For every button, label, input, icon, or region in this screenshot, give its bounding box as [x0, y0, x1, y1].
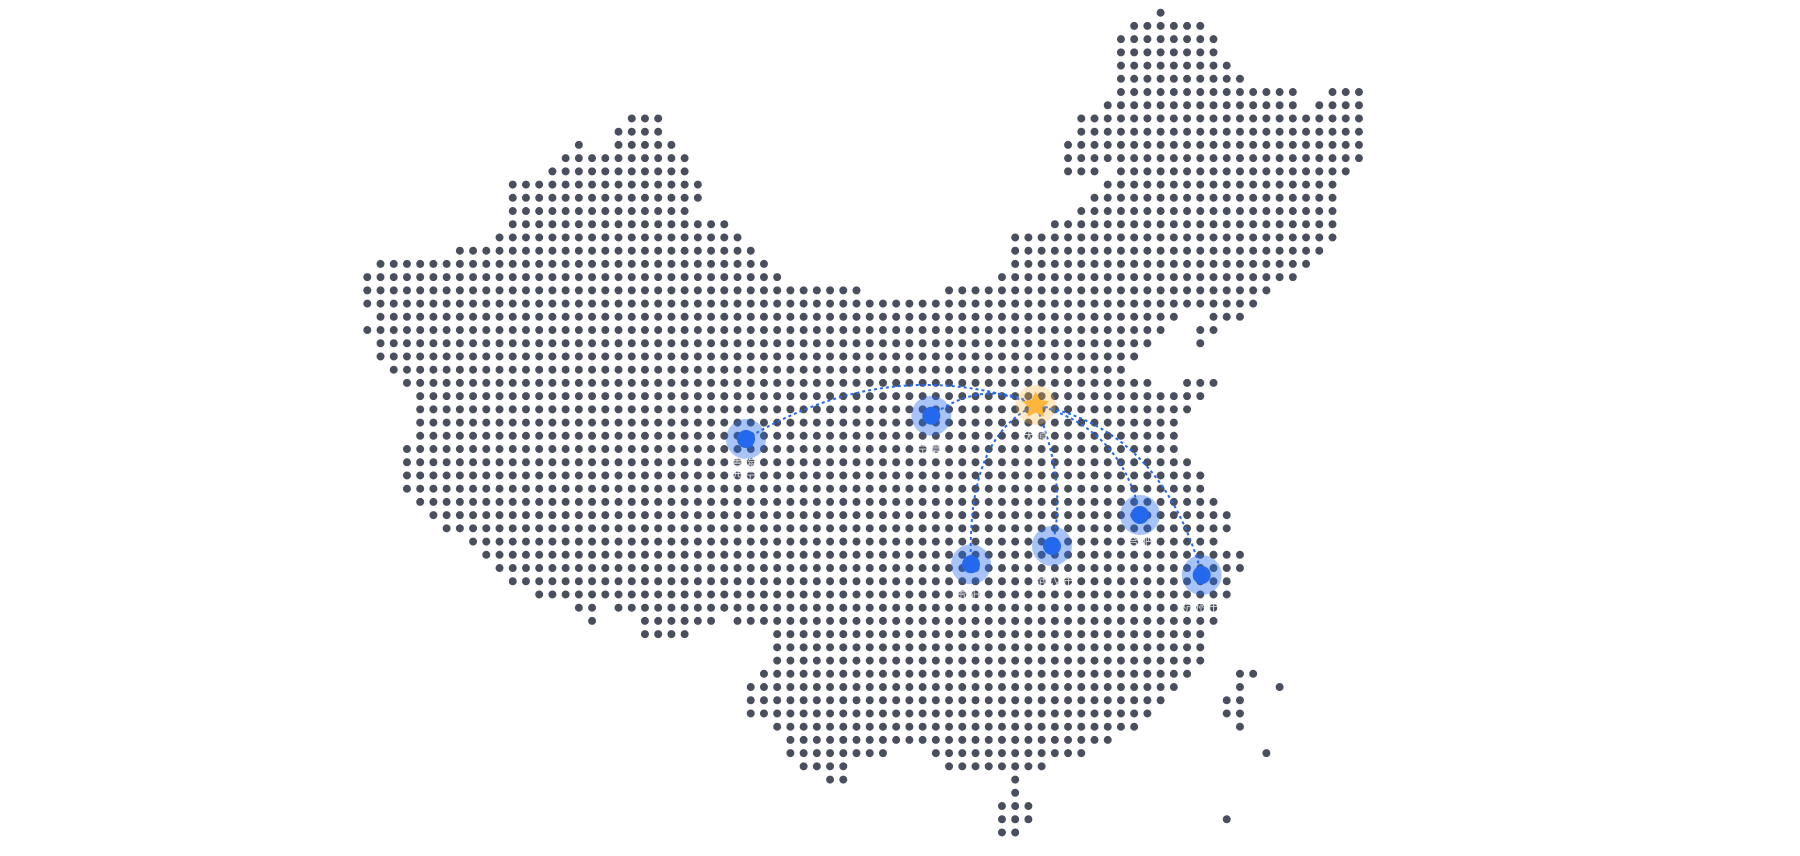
marker: Hangzhou: [1182, 555, 1222, 595]
label: Qinghai: 青海: [731, 456, 758, 471]
marker: Qinghai: [726, 419, 766, 459]
dot matrix map of China: [367, 13, 1359, 832]
label: Ningxia: 宁夏: [917, 442, 943, 457]
marker: Wuhan: [1032, 526, 1072, 566]
marker: Chongqing: [951, 544, 991, 584]
dashed connection arcs: [746, 385, 1202, 575]
label: Chongqing: 贵阳: [955, 588, 982, 602]
marker: origin star: [1016, 385, 1056, 425]
marker: Anhui: [1120, 495, 1160, 535]
label: Wuhan: 武汉市: [1036, 574, 1076, 589]
label: Hangzhou: 杭州市: [1181, 600, 1221, 615]
marker: Ningxia: [911, 396, 951, 436]
label: origin: 太原: [1023, 429, 1050, 444]
label: Qinghai: 西宁: [731, 468, 758, 483]
label: Anhui: 合肥: [1127, 534, 1154, 549]
